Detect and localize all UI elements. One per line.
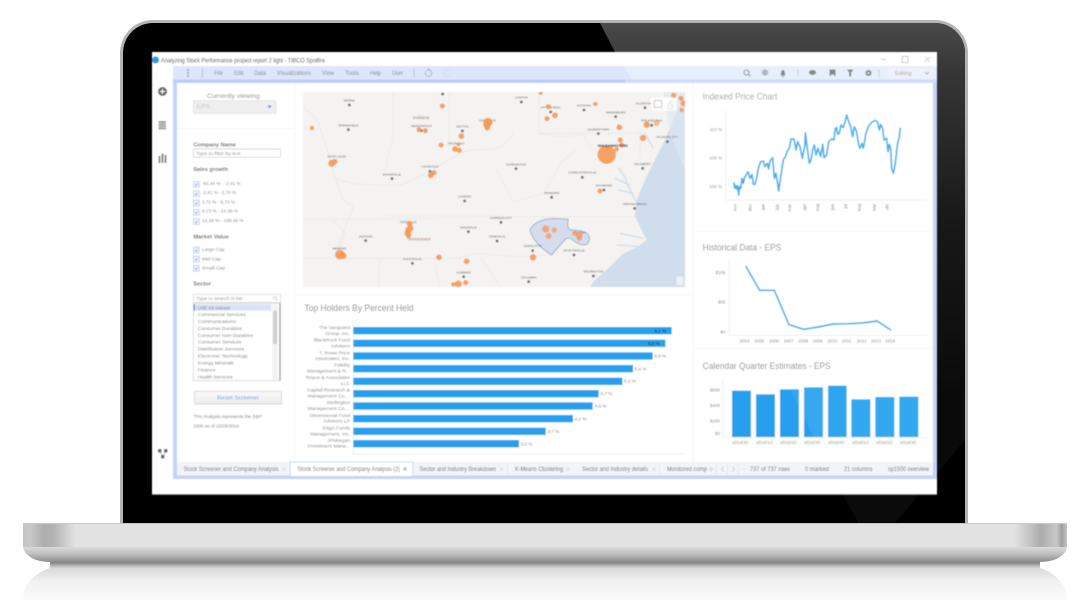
panel: filters upper	[193, 94, 281, 240]
city labels: CHARLOTTE	[524, 244, 542, 248]
analysis note: 1500 as of 10/28/2014.	[193, 423, 240, 428]
city labels: ATLANTIC CITY	[656, 135, 678, 139]
currently viewing dropdown	[193, 94, 276, 113]
city labels: SAINT LOUIS	[327, 155, 346, 159]
sector filter: Health Services	[198, 374, 233, 379]
city labels: COLUMBUS	[479, 119, 496, 123]
calendar quarter estimates chart: 2015/3C	[804, 440, 822, 445]
city labels: EVANSVILLE	[383, 172, 401, 176]
city labels: MEMPHIS	[332, 246, 346, 250]
city labels: LONDON	[458, 195, 471, 199]
sector filter: Commercial Services	[198, 312, 246, 317]
historical data chart: 2005	[754, 339, 765, 344]
water	[590, 92, 685, 287]
historical data chart: 2006	[769, 339, 779, 344]
bar chart: top holders: Royce & Associates	[306, 375, 350, 381]
sector filter	[193, 282, 281, 381]
sector filter: Consumer Non-Durables	[198, 333, 254, 338]
market value options: Large Cap	[202, 247, 225, 252]
location dots	[310, 91, 686, 287]
icon: bar chart	[158, 154, 166, 163]
bar chart: top holders: Wellington	[327, 400, 350, 406]
city labels: CHARLOTTESVILLE	[568, 171, 596, 175]
sector filter: Consumer Durables	[198, 326, 243, 331]
calendar quarter estimates chart: Calendar Quarter Estimates - EPS	[703, 361, 831, 371]
historical data chart: 2010	[827, 339, 838, 344]
bar chart: top holders: BlackRock Fund	[314, 337, 350, 343]
bottom tab bar: 737 of 737 rows	[750, 466, 790, 473]
indexed price chart: 105 %	[709, 155, 722, 160]
sector filter: Distribution Services	[198, 347, 245, 352]
city labels: HARRISBURG	[606, 110, 626, 114]
calendar quarter estimates chart: $400	[710, 403, 720, 408]
map tools	[651, 98, 683, 285]
bar chart: top holders: 4,2 %	[575, 416, 587, 421]
sector filter: Communications	[198, 319, 237, 324]
toolbar: Tools	[345, 70, 359, 77]
currently viewing dropdown: EPS	[197, 104, 211, 111]
indexed price chart: maj	[815, 204, 820, 211]
city labels: PITTSBURGH	[541, 105, 560, 109]
toolbar: View	[322, 70, 334, 77]
city labels: RALEIGH	[572, 231, 586, 235]
city labels: LOUISVILLE	[421, 165, 439, 169]
currently viewing dropdown: Currently viewing	[207, 94, 260, 100]
bar chart: top holders: 6,1 %	[654, 328, 667, 333]
calendar quarter estimates chart: 2016/2C	[876, 440, 894, 445]
calendar quarter estimates chart: 2014/4C	[732, 440, 750, 445]
bar chart: top holders: 6,0 %	[648, 341, 661, 346]
app frame	[173, 66, 937, 479]
company name filter: Type to filter by text	[196, 151, 241, 156]
panel: filters lower	[193, 247, 282, 428]
reset screener button	[194, 391, 282, 404]
window title bar	[152, 56, 930, 64]
bar chart: top holders: 5,8 %	[654, 354, 666, 359]
city labels: CUMMING	[456, 270, 472, 274]
bar chart: top holders: Investment Mana...	[308, 444, 350, 450]
historical data chart: 2007	[784, 339, 794, 344]
city labels: KNOXVILLE	[460, 225, 477, 229]
sales growth filter	[193, 167, 244, 225]
toolbar: User	[392, 70, 403, 77]
city labels: COLUMBIA	[521, 275, 536, 279]
indexed price chart: jul	[843, 204, 848, 209]
bar chart: top holders: Advisers	[331, 343, 350, 349]
indexed price chart: apr	[802, 203, 807, 210]
city labels: ALLENTOWN	[636, 101, 654, 105]
city labels: ALTOONA	[577, 103, 591, 107]
bottom tab bar: 21 columns	[844, 466, 872, 473]
calendar quarter estimates chart: 2016/3C	[900, 440, 918, 445]
city labels: PEORIA	[344, 99, 355, 103]
state borders and rivers	[334, 133, 640, 260]
bar chart: top holders: Fidelity	[334, 363, 350, 369]
city labels: JACKSON	[359, 234, 373, 238]
selection region	[530, 218, 589, 255]
company name filter	[193, 142, 281, 157]
city labels: ASHEVILLE	[489, 235, 505, 239]
city markers	[347, 93, 669, 283]
historical data chart: 2011	[842, 339, 852, 344]
calendar quarter estimates chart: 2016/1C	[852, 440, 870, 445]
city labels: ROANOKE	[544, 191, 559, 195]
historical data chart: 2013	[871, 339, 881, 344]
analysis note	[193, 414, 262, 428]
calendar quarter estimates chart: $200	[710, 418, 720, 423]
historical data chart: 2014	[885, 339, 896, 344]
calendar quarter estimates chart: 2015/1C	[756, 440, 774, 445]
sector filter: (All) 19 values	[198, 305, 231, 310]
toolbar: Edit	[234, 70, 244, 77]
city labels: CANTON	[515, 96, 528, 100]
toolbar: Data	[254, 70, 266, 77]
market value options: Mid Cap	[202, 256, 221, 261]
city labels: CHARLESTON	[506, 162, 526, 166]
bar chart: top holders	[306, 320, 685, 454]
top holders title: Top Holders By Percent Held	[304, 303, 414, 314]
bar chart: top holders: LLC	[341, 381, 350, 387]
base reflection	[23, 568, 1067, 600]
indexed price chart: 110 %	[710, 127, 722, 132]
sales growth filter: 2,72 % - 6,73 %	[202, 199, 235, 204]
city labels: DAYTON	[456, 124, 468, 128]
bottom tab bar: K-Means Clustering	[515, 466, 563, 473]
bottom tab bar: Sector and Industry details	[582, 466, 648, 473]
city labels: WILMINGTON	[584, 270, 603, 274]
bar chart: top holders: 5,2 %	[624, 379, 636, 384]
icon: table	[158, 121, 166, 130]
historical data chart	[703, 243, 927, 344]
market value options: Small Cap	[202, 266, 225, 271]
city labels: CINCINNATI	[448, 142, 465, 146]
calendar quarter estimates chart: 2015/4C	[828, 440, 846, 445]
map: Indiana	[413, 115, 429, 121]
bar chart: top holders: 5,4 %	[635, 366, 647, 371]
calendar quarter estimates chart: $0	[715, 431, 720, 436]
bar chart: top holders: 3,7 %	[547, 429, 559, 434]
bottom tab bar: sp1500 overview	[888, 466, 929, 473]
indexed price chart: okt	[884, 203, 889, 210]
city labels: RICHMOND	[596, 184, 613, 188]
indexed price chart: aug	[856, 203, 861, 211]
indexed price chart: sep	[871, 203, 876, 211]
sales growth filter: 14,38 % - 168,46 %	[202, 218, 244, 223]
city labels: HUNTSVILLE	[403, 257, 422, 261]
bar chart: top holders: Management Co....	[308, 393, 350, 399]
bar chart: top holders: 3,2 %	[521, 441, 533, 446]
toolbar	[173, 66, 937, 83]
left icon rail	[158, 87, 168, 458]
bar chart: top holders: 4,7 %	[600, 391, 612, 396]
historical data chart: 2012	[857, 339, 867, 344]
historical data chart: 2009	[813, 339, 823, 344]
toolbar: Editing	[895, 71, 912, 77]
indexed price chart: dec	[747, 203, 752, 211]
bottom tab bar: Stock Screener and Company Analysis (2)	[298, 466, 400, 473]
toolbar: Visualizations	[277, 70, 311, 77]
sales growth filter: -2,41 % - 2,70 %	[202, 190, 236, 195]
company name filter: Company Name	[193, 142, 236, 148]
analysis note: This Analysis represents the S&P	[193, 414, 262, 419]
sector filter: Consumer Services	[198, 340, 242, 345]
sales growth filter: 6,73 % - 14,36 %	[202, 209, 238, 214]
calendar quarter estimates chart	[703, 361, 927, 445]
laptop base	[23, 523, 1067, 568]
toolbar: Help	[370, 70, 381, 77]
sector filter: Type to search in list	[196, 296, 243, 301]
sector filter: Finance	[198, 367, 216, 372]
city labels: SALISBURY	[634, 162, 651, 166]
historical data chart: Historical Data - EPS	[703, 243, 781, 253]
indexed price chart: 100 %	[709, 184, 722, 189]
map	[303, 91, 686, 287]
historical data chart: 2008	[798, 339, 809, 344]
reset screener button: Reset Screener	[217, 396, 259, 402]
bar chart: top holders: Associates, Inc.	[315, 356, 350, 362]
market value heading: Market Value	[193, 234, 229, 240]
city labels: VIRGINIA BEACH	[623, 202, 647, 206]
city labels: PHILADELPHIA	[641, 119, 662, 123]
sector filter: Sector	[193, 282, 212, 288]
bar chart: top holders: Dimensional Fund	[310, 413, 350, 419]
indexed price chart: jun	[830, 203, 835, 211]
icon: network	[158, 449, 168, 458]
city labels: SPRINGFIELD	[338, 123, 359, 127]
bar chart: top holders: SSgA Funds	[322, 426, 350, 432]
bar chart: top holders: The Vanguard	[319, 325, 350, 331]
historical data chart: $5k	[718, 300, 726, 305]
bar chart: top holders: Management Co....	[308, 406, 350, 412]
bottom tab bar: Monitored comp	[667, 466, 707, 473]
sales growth filter: Sales growth	[193, 167, 229, 173]
icon: add	[158, 87, 167, 96]
indexed price chart: nov	[733, 203, 738, 211]
city labels: JOHNSON CITY	[490, 216, 512, 220]
sales growth filter: -81,44 % - -2,41 %	[202, 181, 241, 186]
city labels: NASHVILLE	[400, 220, 417, 224]
bottom tab bar: 0 marked	[805, 466, 830, 473]
bar chart: top holders: T. Rowe Price	[319, 350, 350, 356]
map: WASHINGTON	[598, 144, 628, 148]
bar chart: top holders: Group, Inc.	[325, 331, 350, 337]
bottom tab bar	[177, 462, 933, 476]
calendar quarter estimates chart: $600	[710, 388, 720, 393]
indexed price chart: feb	[775, 203, 780, 210]
city labels: HAGERSTOWN	[587, 127, 609, 131]
toolbar: File	[214, 70, 223, 77]
sector filter: Electronic Technology	[198, 354, 248, 359]
historical data chart: $10k	[716, 270, 726, 275]
bar chart: top holders: Capital Research &	[307, 388, 351, 394]
city labels: FAYETTEVILLE	[563, 249, 585, 253]
bottom tab bar: Stock Screener and Company Analysis	[184, 466, 278, 473]
indexed price chart: Indexed Price Chart	[703, 92, 778, 102]
historical data chart: $0	[720, 330, 726, 335]
sector filter: Energy Minerals	[198, 361, 234, 366]
calendar quarter estimates chart: 2015/2C	[780, 440, 798, 445]
indexed price chart: jan	[761, 203, 766, 211]
indexed price chart	[703, 92, 927, 212]
window title bar: Analyzing Stock Performance proped report 2 light - TIBCO Spotfire	[161, 58, 325, 64]
bar chart: top holders: Management & R...	[307, 369, 350, 375]
panel dividers	[177, 83, 933, 462]
indexed price chart: mar	[787, 204, 792, 212]
laptop lid	[120, 20, 968, 525]
bottom tab bar: Sector and Industry Breakdown	[420, 466, 496, 473]
historical data chart: 2004	[740, 339, 750, 344]
city labels	[327, 96, 678, 279]
bar chart: top holders: JPMorgan	[327, 438, 350, 444]
map: Tennessee	[407, 236, 431, 242]
market value options	[193, 247, 225, 271]
city labels: INDIANAPOLIS	[411, 124, 432, 128]
bar chart: top holders: Management, Inc.	[310, 432, 350, 438]
bar chart: top holders: 4,6 %	[595, 403, 607, 408]
bar chart: top holders: Advisors LP	[323, 419, 351, 425]
application screen	[152, 52, 937, 495]
